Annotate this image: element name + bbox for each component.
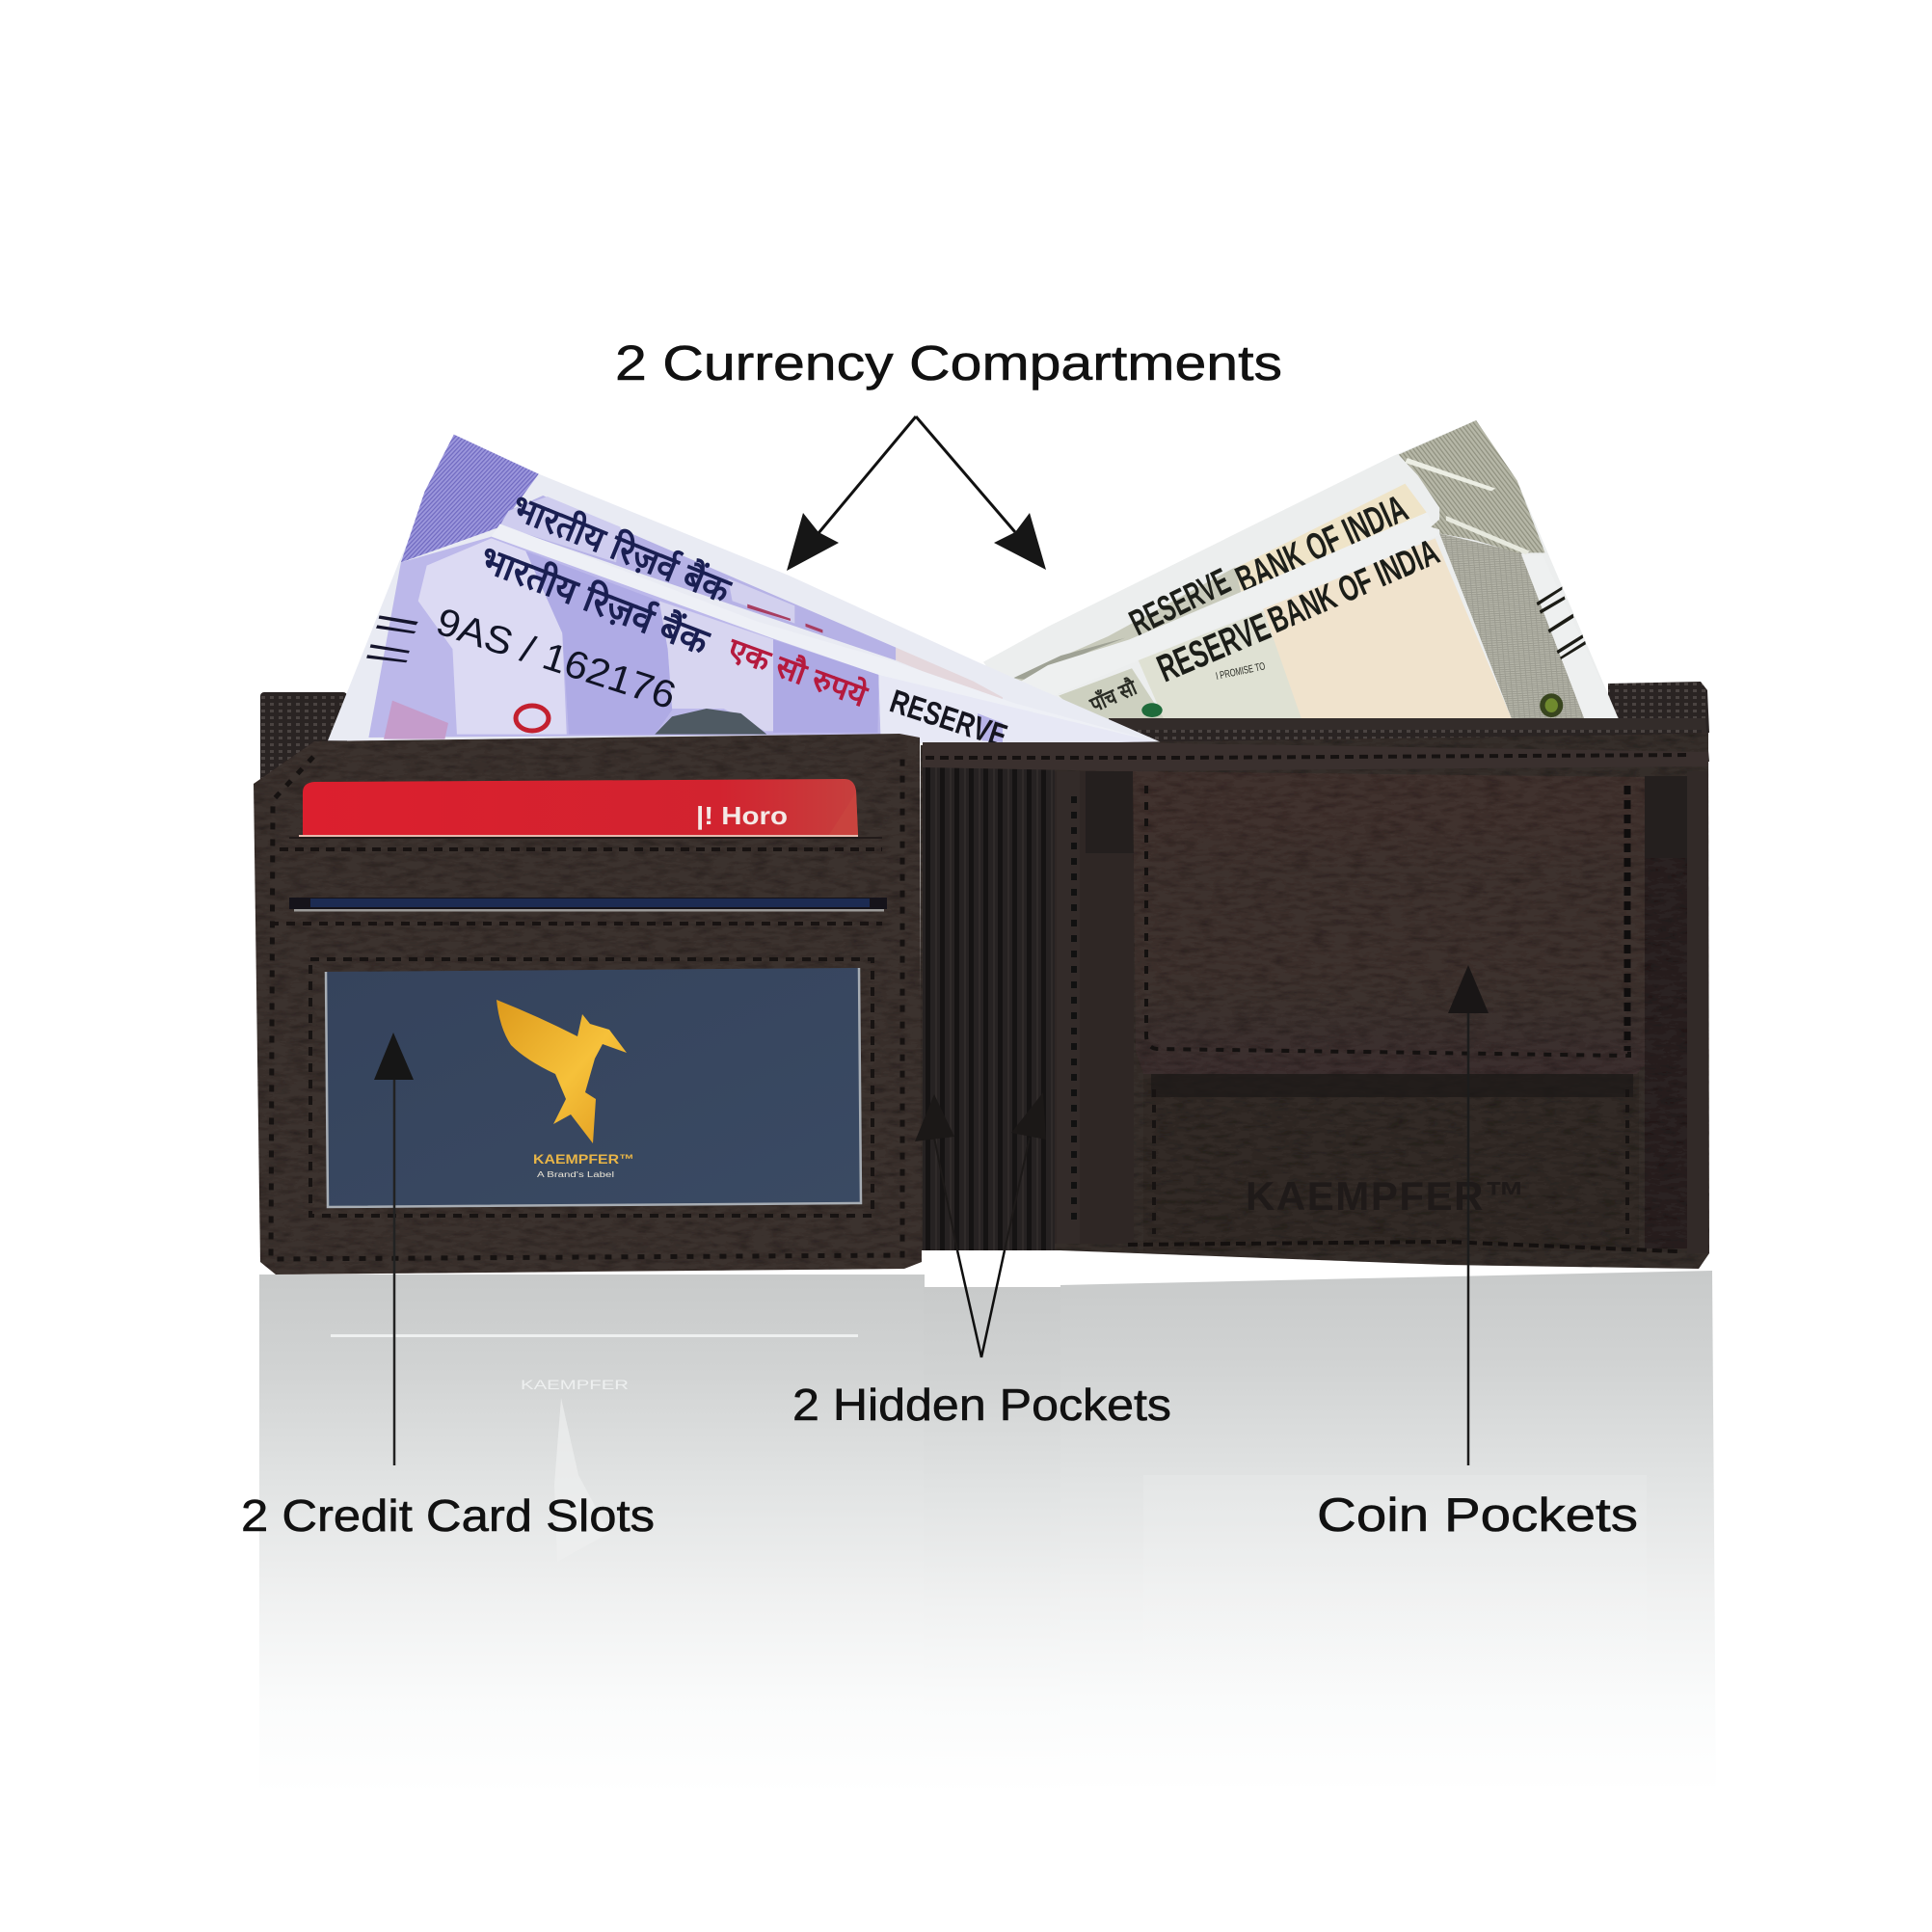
wallet right panel bbox=[921, 733, 1709, 1269]
text: card tagline: A Brand's Label bbox=[537, 1170, 614, 1179]
wallet reflection: KAEMPFER bbox=[521, 1377, 629, 1392]
label: coin pockets with arrow bbox=[1317, 965, 1638, 1542]
window stitching bbox=[310, 959, 872, 1216]
arrow: left hidden pocket bbox=[915, 1094, 981, 1357]
text: brand stamp: KAEMPFER™ bbox=[1246, 1173, 1525, 1219]
coin pocket flap bbox=[1133, 771, 1645, 1074]
left wallet back panel bbox=[260, 692, 347, 789]
icon: gold bird logo bbox=[496, 1000, 627, 1143]
label: coin pockets with arrow: Coin Pockets bbox=[1317, 1489, 1638, 1542]
text: rear note reserve: RESERVE bbox=[1124, 561, 1237, 644]
coin pocket with brand stamp bbox=[1128, 1072, 1677, 1251]
spine with vertical ribs bbox=[923, 765, 1055, 1250]
text: card logo name: KAEMPFER™ bbox=[533, 1151, 634, 1167]
wallet reflection bbox=[259, 1271, 1716, 1795]
label: 2 hidden pockets with arrows: 2 Hidden Pockets bbox=[792, 1380, 1171, 1430]
left stitched column bbox=[1055, 771, 1134, 1244]
text: front note bank of india: BANK OF INDIA bbox=[1263, 532, 1445, 641]
label: 2 hidden pockets with arrows bbox=[792, 1092, 1171, 1430]
arrow: to coin pocket bbox=[1448, 965, 1489, 1465]
lower card slot bbox=[289, 898, 887, 912]
red card in slot bbox=[299, 779, 858, 838]
text: hundred rupees: एक सौ रुपये bbox=[723, 630, 873, 713]
arrow: to right notes bbox=[916, 416, 1046, 570]
banknotes: left, 100 rupee bbox=[328, 435, 1166, 755]
arrow: to card slot bbox=[374, 1033, 414, 1465]
ID window with blue card bbox=[326, 968, 861, 1207]
upper card slot edge bbox=[289, 837, 882, 839]
banknotes: right, 500 rupee bbox=[983, 420, 1621, 736]
text: card brand: |! Horo bbox=[696, 801, 788, 830]
right wallet back panel bbox=[1608, 682, 1709, 733]
text: denomination: पाँच सौ bbox=[1086, 674, 1141, 717]
icon: red zero bbox=[516, 706, 549, 731]
text: guarantee line: I PROMISE TO bbox=[1215, 660, 1267, 683]
text: rear note name: BANK OF INDIA bbox=[1229, 487, 1414, 602]
outer stitching bbox=[271, 750, 902, 1259]
label: 2 currency compartments with arrows bbox=[615, 335, 1282, 571]
right side slot bbox=[1645, 771, 1708, 1253]
label: 2 credit card slots with arrow: 2 Credit Card Slots bbox=[241, 1490, 655, 1541]
label: 2 credit card slots with arrow bbox=[241, 1033, 655, 1541]
arrow: to left notes bbox=[787, 416, 916, 571]
text: serial number: 9AS / 162176 bbox=[431, 601, 681, 717]
arrow: right hidden pocket bbox=[981, 1092, 1046, 1357]
wallet back strip bbox=[1109, 718, 1709, 762]
wallet left flap bbox=[254, 734, 922, 1275]
text: front note reserve: RESERVE bbox=[1151, 605, 1276, 690]
text: front note bank name: भारतीय रिज़र्व बैंक bbox=[474, 537, 716, 664]
label: 2 currency compartments with arrows: 2 Currency Compartments bbox=[615, 335, 1282, 390]
text: rear note bank name: भारतीय रिज़र्व बैंक bbox=[506, 486, 738, 611]
text: reserve: RESERVE bbox=[886, 683, 1011, 755]
